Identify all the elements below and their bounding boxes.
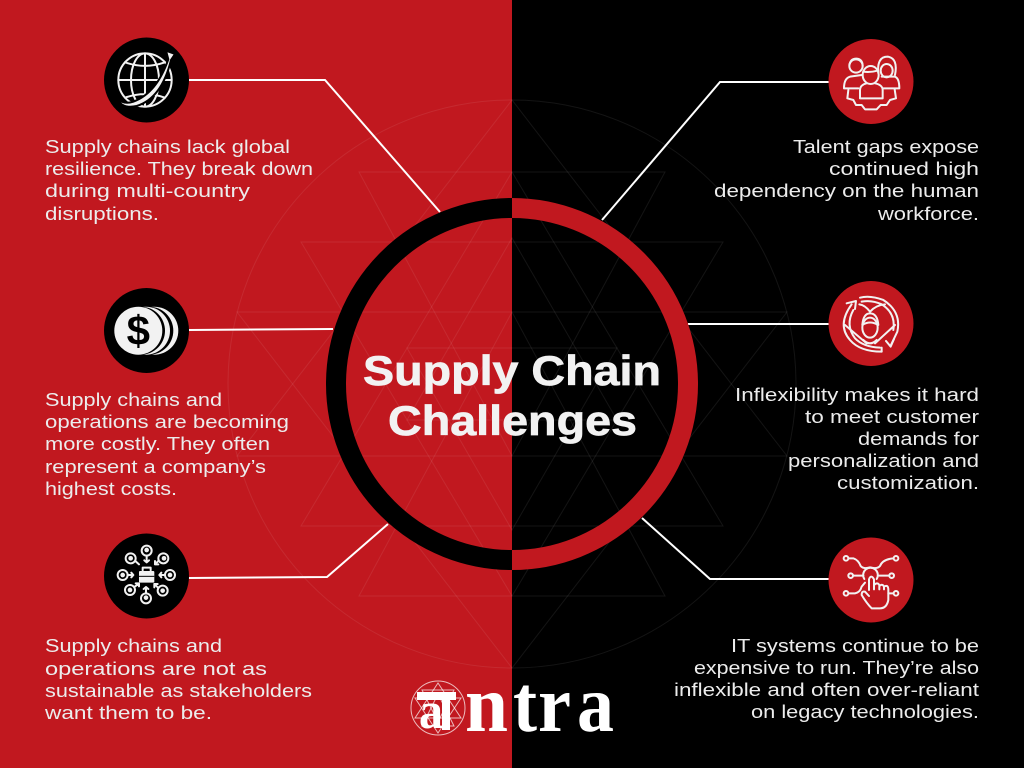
text: talent gaps — [714, 136, 979, 224]
text: sustainability: want them to be. — [44, 702, 212, 723]
icon: touch technology — [828, 538, 914, 622]
title: Challenges — [388, 397, 637, 444]
text: inflexibility: personalization and — [788, 450, 979, 471]
logo: antra — [411, 661, 614, 749]
icon: coins: $ — [127, 307, 150, 354]
text: rising costs — [45, 389, 289, 499]
icon: stakeholders around briefcase — [104, 534, 189, 618]
text: inflexibility: to meet customer — [805, 406, 979, 427]
text: global resilience: disruptions. — [45, 203, 159, 224]
text: sustainability: sustainable as stakeholders — [45, 680, 312, 701]
text: global resilience: resilience. They break down — [45, 158, 313, 179]
text: global resilience: during multi-country — [45, 180, 251, 201]
text: talent gaps: dependency on the human — [714, 180, 979, 201]
icon: logo yantra emblem — [411, 681, 465, 735]
logo: antra: t — [513, 661, 537, 749]
central ring — [336, 208, 688, 560]
text: rising costs: highest costs. — [45, 478, 177, 499]
text: inflexibility: demands for — [858, 428, 979, 449]
text: IT systems: inflexible and often over-reliant — [674, 679, 979, 700]
text: rising costs: Supply chains and — [45, 389, 222, 410]
text: talent gaps: continued high — [829, 158, 979, 179]
text: inflexibility: customization. — [837, 472, 979, 493]
icon: customer heart cycle — [828, 281, 914, 366]
logo: antra: r — [538, 661, 571, 749]
text: sustainability — [44, 635, 312, 723]
text: IT systems: IT systems continue to be — [731, 635, 979, 656]
connector lines — [189, 80, 829, 579]
text: IT systems: expensive to run. They’re also — [694, 657, 979, 678]
watermark: yantra pattern — [228, 100, 796, 668]
text: sustainability: operations are not as — [45, 658, 267, 679]
text: inflexibility — [735, 384, 979, 493]
icon: coins — [104, 288, 189, 373]
logo: antra: n — [465, 661, 508, 749]
text: sustainability: Supply chains and — [45, 635, 222, 656]
title — [363, 347, 661, 444]
icon: team and gear — [828, 39, 914, 124]
text: global resilience: Supply chains lack global — [45, 136, 290, 157]
text: rising costs: represent a company’s — [45, 456, 266, 477]
icon: globe — [104, 38, 189, 122]
text: inflexibility: Inflexibility makes it hard — [735, 384, 979, 405]
logo: antra: a — [419, 683, 443, 740]
text: global resilience — [45, 136, 313, 224]
text: rising costs: more costly. They often — [45, 433, 270, 454]
title: Supply Chain — [363, 347, 661, 394]
text: IT systems: on legacy technologies. — [751, 701, 979, 722]
text: talent gaps: Talent gaps expose — [793, 136, 979, 157]
text: rising costs: operations are becoming — [45, 411, 289, 432]
text: IT systems — [674, 635, 979, 722]
logo: antra: a — [577, 661, 614, 749]
text: talent gaps: workforce. — [877, 203, 979, 224]
